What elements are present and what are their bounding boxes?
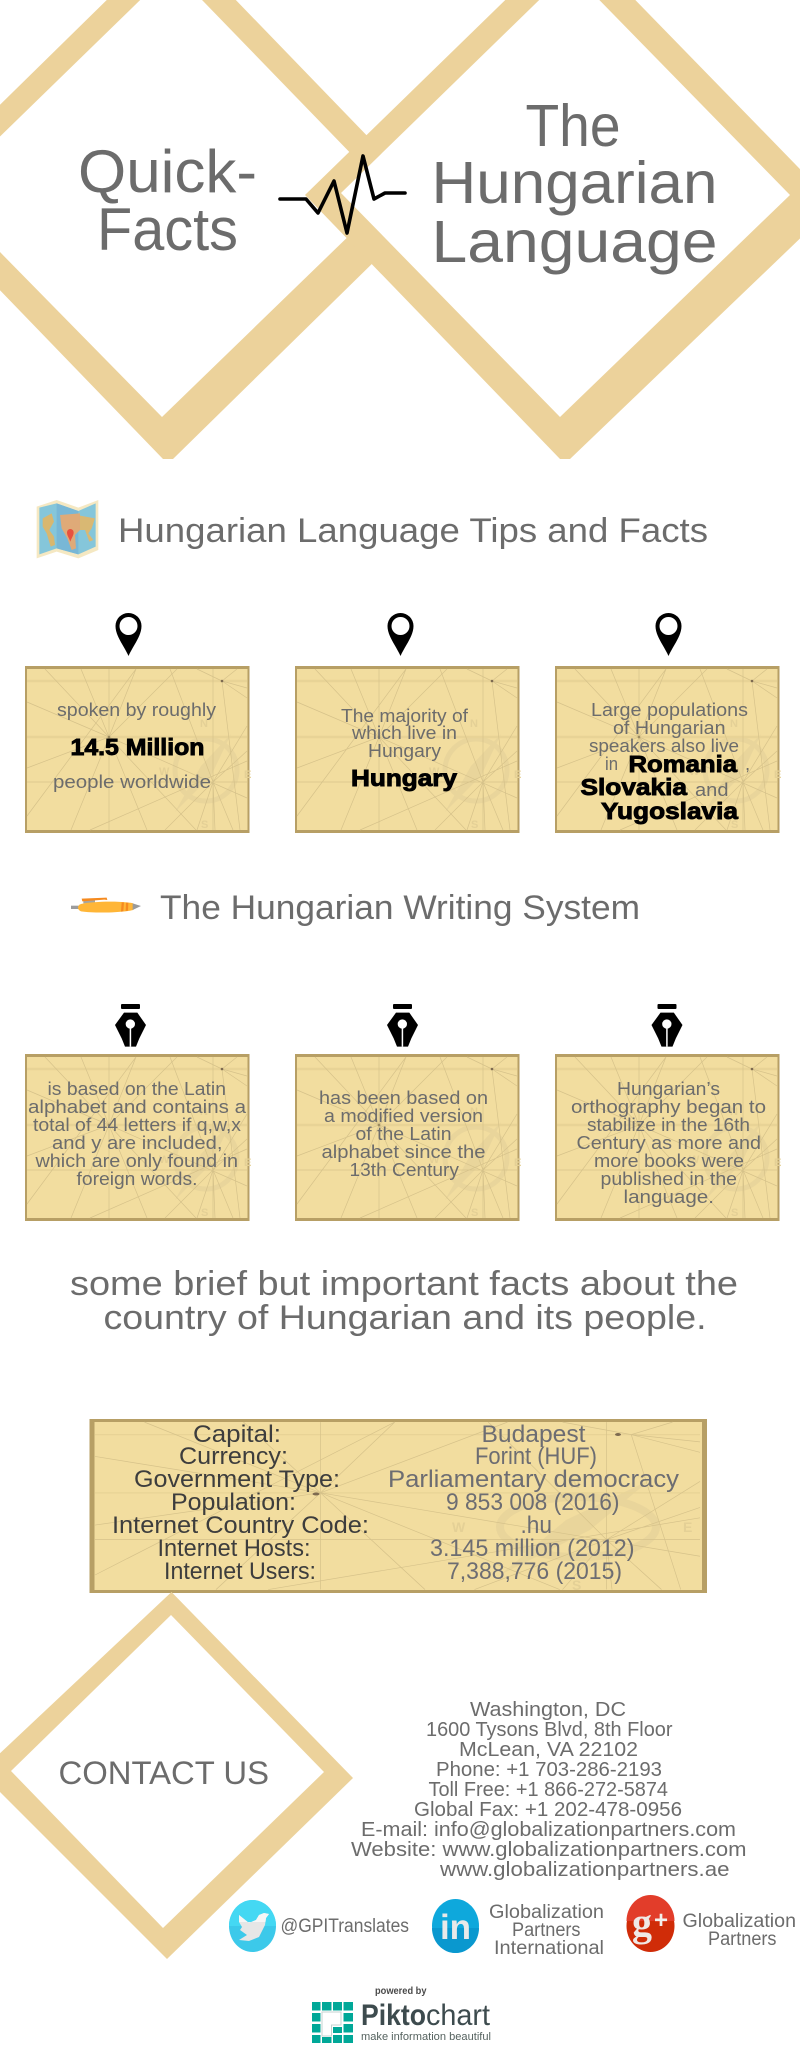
panel: populations in neighbouring countries: , xyxy=(745,753,750,774)
panel: orthography: S xyxy=(731,1207,738,1219)
table values: 7,388,776 (2015) xyxy=(447,1558,622,1585)
panel: modified Latin alphabet: S xyxy=(471,1207,478,1219)
panel: orthography: Century as more and xyxy=(576,1132,761,1153)
panel: modified Latin alphabet: alphabet since the xyxy=(322,1141,486,1162)
text: linkedin name: International xyxy=(494,1938,604,1959)
panel: majority live in Hungary: which live in xyxy=(351,722,457,743)
panel: 14.5 million speakers: people worldwide xyxy=(53,771,211,792)
title: The Hungarian Language: Language xyxy=(432,209,718,275)
panel: orthography: E xyxy=(774,1157,781,1169)
panel: populations in neighbouring countries: speakers also live xyxy=(589,735,739,756)
compass watermark xyxy=(452,1475,692,1593)
piktochart wordmark: Pikto xyxy=(361,1999,426,2032)
panel: populations in neighbouring countries: in xyxy=(605,753,618,774)
table values: .hu xyxy=(520,1512,552,1539)
table labels: Population: xyxy=(171,1489,296,1516)
panel: populations in neighbouring countries: Large populations xyxy=(591,699,748,720)
panel: Latin alphabet: E xyxy=(244,1157,251,1169)
table labels: Currency: xyxy=(179,1443,288,1470)
text block: contact details: E-mail: info@globalizationpartners.com xyxy=(361,1819,736,1841)
text block: intro to country facts: country of Hungarian and its people. xyxy=(104,1299,706,1337)
text block: contact details: Washington, DC xyxy=(470,1699,626,1721)
title: Quick-Facts: Quick- xyxy=(78,138,257,205)
header diamonds xyxy=(0,0,800,459)
icon: pen nib 2 xyxy=(387,1004,418,1047)
panel: majority live in Hungary: S xyxy=(471,819,478,831)
piktochart wordmark: chart xyxy=(426,1999,491,2032)
text block: contact details: Website: www.globalizationpartners.com xyxy=(351,1839,746,1861)
panel: modified Latin alphabet: E xyxy=(514,1157,521,1169)
piktochart wordmark: make information beautiful xyxy=(361,2031,491,2043)
text: linkedin name: Partners xyxy=(512,1920,580,1941)
panel: orthography: language. xyxy=(624,1186,714,1207)
panel: Latin alphabet: total of 44 letters if q,w,x xyxy=(33,1114,242,1135)
panel: populations in neighbouring countries: W xyxy=(689,766,700,778)
contact diamond xyxy=(0,1592,353,1959)
panel: orthography: Hungarian’s xyxy=(617,1078,720,1099)
panel: Latin alphabet: which are only found in xyxy=(34,1150,238,1171)
icon: linkedin: in xyxy=(440,1908,471,1947)
panel: 14.5 million speakers xyxy=(25,666,251,833)
icon: google plus: g xyxy=(632,1900,652,1945)
panel: modified Latin alphabet: 13th Century xyxy=(350,1159,460,1180)
panel: orthography: W xyxy=(689,1154,700,1166)
text block: contact details xyxy=(351,1699,746,1881)
panel: modified Latin alphabet: W xyxy=(429,1154,440,1166)
panel: 14.5 million speakers: W xyxy=(159,766,170,778)
panel: orthography xyxy=(555,1054,781,1221)
piktochart wordmark xyxy=(361,1999,491,2043)
panel: populations in neighbouring countries: and xyxy=(695,779,728,800)
icon: pen nib 3 xyxy=(651,1004,682,1047)
table values: Forint (HUF) xyxy=(475,1443,597,1470)
icon: linkedin xyxy=(432,1899,479,1953)
text: google plus name: Partners xyxy=(708,1929,776,1950)
icon: twitter xyxy=(229,1900,276,1952)
panel: majority live in Hungary: W xyxy=(429,766,440,778)
compass watermark: N xyxy=(570,1475,580,1491)
icon: pen nib 1 xyxy=(115,1004,146,1047)
twitter handle: @GPITranslates xyxy=(280,1916,409,1937)
table labels: Capital: xyxy=(193,1421,281,1448)
text: google plus name: Globalization xyxy=(682,1911,796,1932)
panel: modified Latin alphabet: a modified version xyxy=(324,1105,483,1126)
panel: populations in neighbouring countries xyxy=(555,666,781,833)
title: The Hungarian Language: The xyxy=(526,93,620,159)
panel: 14.5 million speakers: spoken by roughly xyxy=(57,699,217,720)
panel: Latin alphabet xyxy=(25,1054,251,1221)
table values xyxy=(388,1421,679,1585)
table labels: Internet Hosts: xyxy=(158,1535,310,1562)
panel: modified Latin alphabet xyxy=(295,1054,521,1221)
text block: intro to country facts: some brief but important facts about the xyxy=(70,1265,738,1303)
panel: majority live in Hungary: N xyxy=(470,718,478,730)
panel: modified Latin alphabet: N xyxy=(470,1106,478,1118)
icon: pen xyxy=(71,898,141,912)
table labels: Internet Country Code: xyxy=(112,1512,369,1539)
text block: contact details: Phone: +1 703-286-2193 xyxy=(436,1759,662,1781)
text: linkedin name: Globalization xyxy=(489,1902,604,1923)
panel: populations in neighbouring countries: S xyxy=(731,819,738,831)
icon: map xyxy=(37,500,98,558)
panel: orthography: orthography began to xyxy=(571,1096,766,1117)
title: The Hungarian Language: Hungarian xyxy=(432,150,718,216)
panel: populations in neighbouring countries: of Hungarian xyxy=(613,717,726,738)
icon: location pin 1 xyxy=(116,613,142,656)
heading: Hungarian Language Tips and Facts: Hungarian Language Tips and Facts xyxy=(118,512,708,550)
compass watermark: E xyxy=(683,1519,692,1535)
panel: modified Latin alphabet: of the Latin xyxy=(356,1123,452,1144)
panel: populations in neighbouring countries: E xyxy=(774,769,781,781)
panel: orthography: stabilize in the 16th xyxy=(587,1114,750,1135)
text: google plus name xyxy=(682,1911,796,1950)
text: linkedin name xyxy=(489,1902,604,1959)
text block: contact details: 1600 Tysons Blvd, 8th Floor xyxy=(426,1719,673,1741)
panel: 14.5 million speakers: E xyxy=(244,769,251,781)
icon: google plus: + xyxy=(654,1907,668,1934)
heading: The Hungarian Writing System: The Hungarian Writing System xyxy=(160,889,640,927)
heading: contact us: CONTACT US xyxy=(58,1755,269,1791)
powered by label: powered by xyxy=(375,1986,427,1997)
table values: 3.145 million (2012) xyxy=(430,1535,634,1562)
icon: heartbeat line xyxy=(280,156,405,233)
panel: majority live in Hungary: Hungary xyxy=(368,740,442,761)
table labels: Government Type: xyxy=(134,1466,340,1493)
table labels xyxy=(112,1421,369,1585)
table values: 9 853 008 (2016) xyxy=(446,1489,620,1516)
text block: intro to country facts xyxy=(70,1265,738,1337)
panel: 14.5 million speakers: N xyxy=(200,718,208,730)
panel: Latin alphabet: alphabet and contains a xyxy=(28,1096,247,1117)
table values: Budapest xyxy=(482,1421,586,1448)
icon: location pin 3 xyxy=(656,613,682,656)
icon: piktochart logo xyxy=(312,2002,353,2043)
panel: country facts table xyxy=(90,1419,707,1593)
table values: Parliamentary democracy xyxy=(388,1466,679,1493)
panel: Latin alphabet: and y are included, xyxy=(52,1132,222,1153)
panel: majority live in Hungary: The majority of xyxy=(341,705,469,726)
panel: 14.5 million speakers: S xyxy=(201,819,208,831)
text block: contact details: www.globalizationpartners.ae xyxy=(439,1859,730,1881)
compass watermark: W xyxy=(452,1519,466,1535)
panel: majority live in Hungary: Hungary xyxy=(351,765,457,791)
panel: populations in neighbouring countries: Slovakia xyxy=(580,774,687,800)
text block: contact details: McLean, VA 22102 xyxy=(459,1739,638,1761)
table labels: Internet Users: xyxy=(164,1558,316,1585)
title: Quick-Facts: Facts xyxy=(97,196,238,263)
panel: populations in neighbouring countries: Yugoslavia xyxy=(601,798,738,824)
compass watermark: S xyxy=(572,1577,581,1593)
panel: Latin alphabet: N xyxy=(200,1106,208,1118)
icon: location pin 2 xyxy=(388,613,414,656)
title: The Hungarian Language xyxy=(432,93,718,275)
panel: Latin alphabet: S xyxy=(201,1207,208,1219)
panel: populations in neighbouring countries: N xyxy=(730,718,738,730)
title: Quick-Facts xyxy=(78,138,257,263)
panel: majority live in Hungary xyxy=(295,666,521,833)
panel: populations in neighbouring countries: Romania xyxy=(628,751,737,777)
icon: google plus xyxy=(626,1895,674,1952)
panel: Latin alphabet: foreign words. xyxy=(76,1168,198,1189)
panel: orthography: N xyxy=(730,1106,738,1118)
panel: majority live in Hungary: E xyxy=(514,769,521,781)
panel: Latin alphabet: W xyxy=(159,1154,170,1166)
panel: orthography: published in the xyxy=(600,1168,737,1189)
text block: contact details: Global Fax: +1 202-478-0956 xyxy=(414,1799,682,1821)
panel: 14.5 million speakers: 14.5 Million xyxy=(70,734,204,760)
panel: Latin alphabet: is based on the Latin xyxy=(48,1078,226,1099)
panel: modified Latin alphabet: has been based on xyxy=(319,1087,488,1108)
text block: contact details: Toll Free: +1 866-272-5874 xyxy=(428,1779,668,1801)
panel: orthography: more books were xyxy=(594,1150,744,1171)
